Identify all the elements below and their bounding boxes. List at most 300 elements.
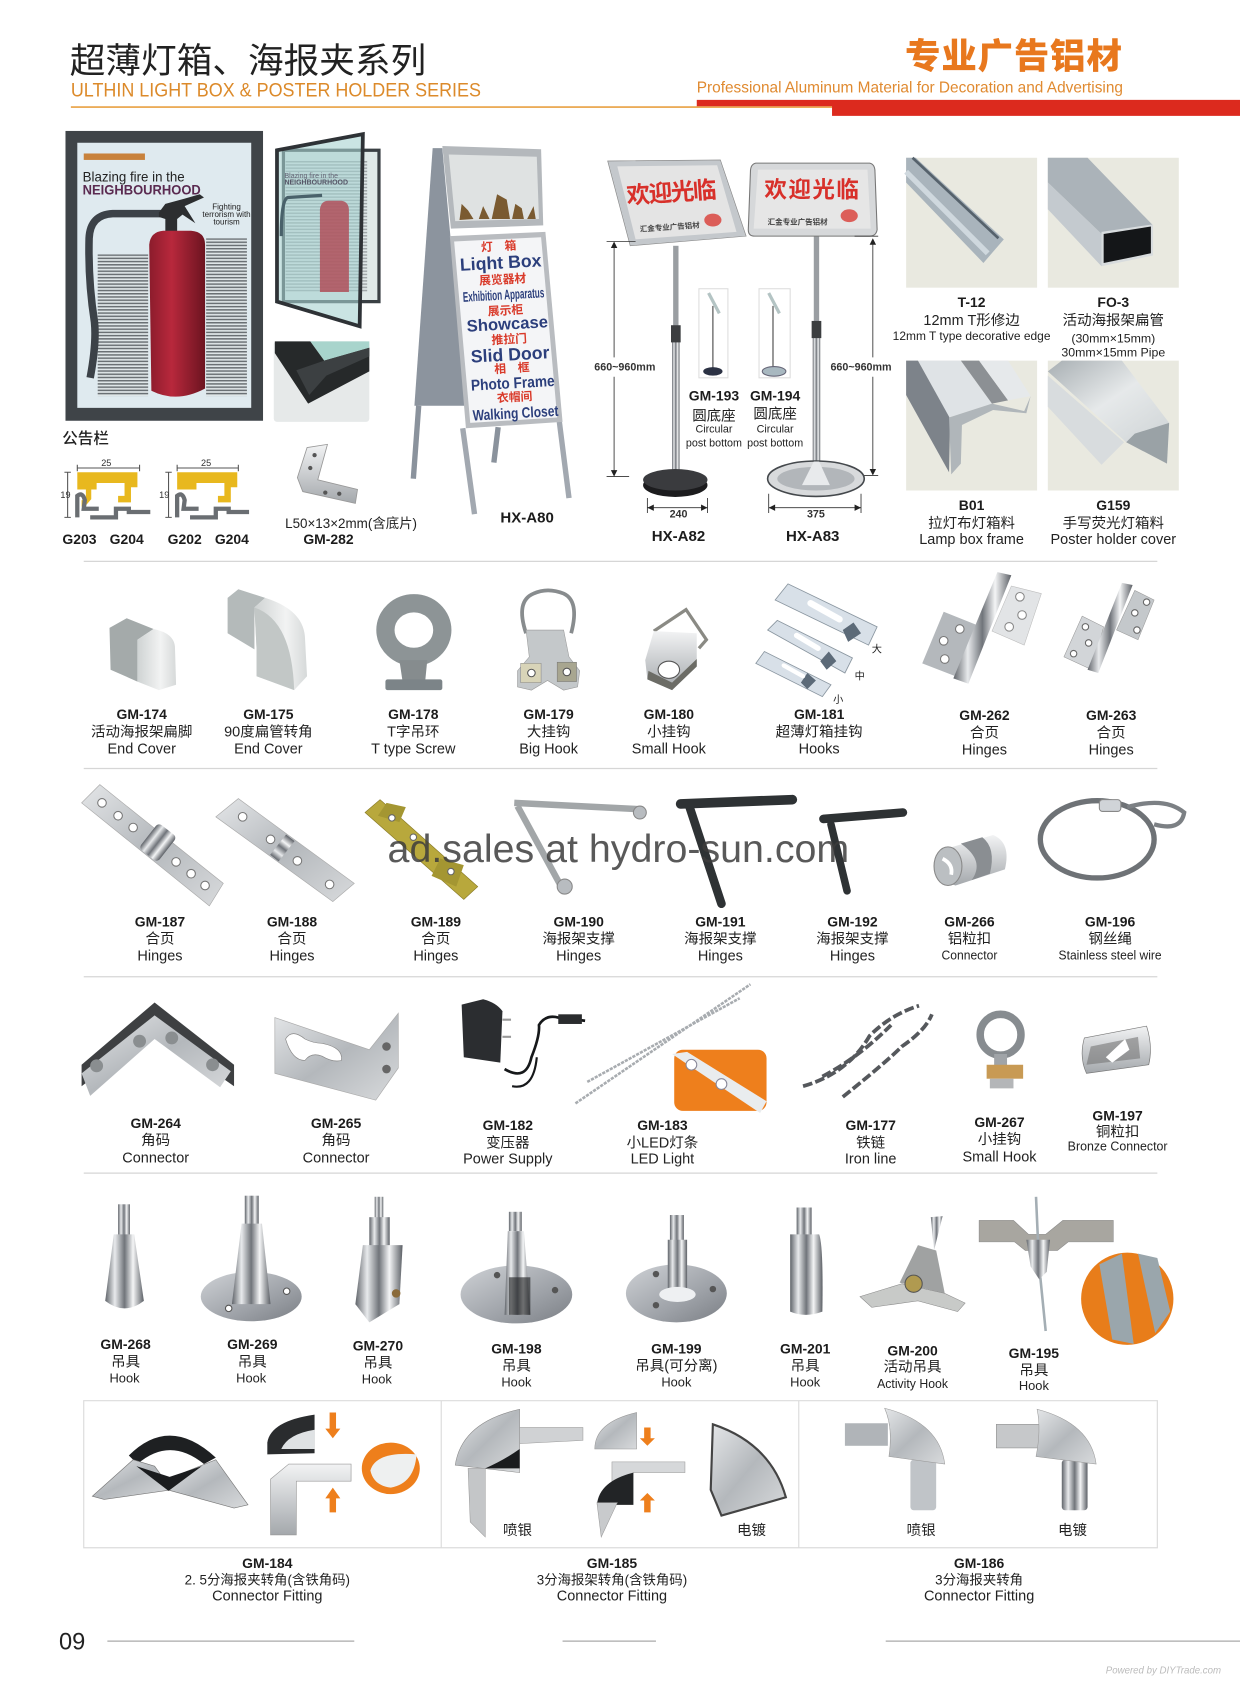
label: GM-197 [1068,1108,1168,1154]
label: GM-175: End Cover [234,741,303,757]
label: GM-194: Circular [757,424,794,436]
label: GM-184: Connector Fitting [212,1588,322,1604]
label: GM-192: 海报架支撑 [816,930,889,947]
label: GM-183: GM-183 [637,1117,688,1133]
label: GM-200: Activity Hook [877,1376,949,1391]
icon: GM-265 corner connector [275,1013,398,1100]
label: GM-190: 海报架支撑 [542,930,615,947]
panel captions: 喷银 [907,1522,936,1539]
product: HX-A83 stand [748,163,877,496]
profile labels: G202 [168,531,202,547]
icon: GM-262 hinge [922,572,1041,684]
label: T-12: 12mm T type decorative edge [893,329,1051,343]
label: GM-188 [267,913,317,965]
label: GM-182 [463,1117,553,1168]
plate left [1064,616,1104,670]
labels: row four [100,1336,1059,1393]
label: GM-177: 铁链 [856,1134,886,1151]
top panel image [449,155,539,221]
orange tag [84,153,145,160]
label: GM-195: GM-195 [1009,1345,1059,1361]
label: GM-264: GM-264 [130,1115,181,1131]
label: GM-196: GM-196 [1085,913,1136,929]
extinguisher head [159,194,204,232]
icon: GM-177 chain [803,1006,932,1097]
icon: GM-190 support [514,803,646,894]
label: GM-191: Hinges [698,949,743,965]
label: GM-190: Hinges [556,949,601,965]
label: GM-262: GM-262 [959,707,1010,723]
cable [1036,1197,1046,1331]
icon: GM-181 hook plates: 中 [855,669,865,682]
board text: 展览器材 [479,271,527,288]
GM-185 assembled corner [455,1409,583,1537]
profile labels: G204 [215,531,249,547]
label: GM-193: GM-193 [689,387,739,403]
panel captions: 电镀 [1058,1522,1088,1539]
icon: GM-182 power supply [462,999,585,1087]
label: GM-282: GM-282 [303,531,354,547]
icon: GM-191 support [681,800,792,904]
profile labels [62,531,249,547]
label: GM-178: T type Screw [371,741,456,757]
dark back [82,1003,234,1086]
profile G202 G204 [159,458,249,517]
label: B01: B01 [959,497,985,513]
board text: Exhibition Apparatus [462,284,545,305]
label: GM-177 [845,1117,896,1168]
extinguisher hose [89,214,161,378]
profile G203 G204 [60,458,150,517]
sign small text: 汇金专业广告铝材 [768,216,828,226]
icon: GM-174 end cover [110,618,176,690]
dimension: base 240 [647,498,707,520]
board text: Showcase [466,312,548,336]
label: GM-181: Hooks [799,741,840,757]
back legs [413,406,498,479]
sign logo [841,209,858,222]
label: GM-265: 角码 [322,1132,351,1149]
profile G203 G204: 19 [60,490,71,500]
sign logo [704,214,721,226]
board text: 推拉门 [491,331,527,347]
icon: GM-269 hook [201,1196,302,1321]
plate [979,1220,1113,1250]
large plate [775,584,877,645]
icon: GM-266 connector [934,835,1007,886]
sign panel [617,165,736,239]
label: GM-267 [962,1114,1037,1165]
icon: GM-197 bronze connector [1082,1026,1150,1073]
thumbnail: GM-193 [699,289,728,378]
label: GM-196: 钢丝绳 [1088,930,1132,947]
label: GM-193 [686,387,742,450]
icon: GM-188 hinge [216,799,354,902]
label: HX-A80: HX-A80 [500,510,554,527]
label: T-12 [893,294,1051,343]
sign frame [748,163,877,236]
label: GM-198 [491,1340,542,1390]
profile labels: G203 [62,531,97,547]
front legs [463,422,569,514]
plate slots [811,603,840,619]
product: HX-A82 stand [608,160,746,497]
frame corner detail photo [274,341,369,422]
label: GM-193: Circular [695,424,733,436]
grey profile [177,494,249,517]
brand subtitle: Professional Aluminum Material for Decoration and Advertising [697,79,1123,96]
label: GM-185: 3分海报架转角(含铁角码) [537,1572,687,1587]
GM-184 top piece highlight [281,1430,315,1449]
label: GM-186: GM-186 [954,1555,1005,1571]
label: GM-264: Connector [122,1150,189,1166]
sign welcome text: 欢迎光临 [626,177,717,210]
dimension marks [64,465,140,517]
label: GM-263: GM-263 [1086,707,1137,723]
labels: row two [135,913,1162,965]
label: B01: Lamp box frame [919,532,1024,548]
dimension: height left [594,242,655,477]
label: GM-265: Connector [303,1150,370,1166]
icon: GM-187 hinge [82,785,223,906]
label: FO-3: FO-3 [1097,294,1129,310]
poster frame product: tourism [213,217,240,226]
door glass [277,134,363,326]
label: GM-185: GM-185 [587,1555,637,1571]
label: GM-177: Iron line [845,1152,896,1168]
orange magnifier [1081,1253,1173,1345]
label: GM-186: Connector Fitting [924,1588,1034,1604]
label: GM-201: 吊具 [791,1359,820,1375]
dimension: height right [830,236,892,475]
size marks: 大 [872,643,882,656]
grey profile [77,494,150,517]
label: GM-191 [684,913,757,965]
GM-185 plated part [711,1424,786,1516]
profile photo: FO-3 [1048,158,1179,288]
poster headline bold: NEIGHBOURHOOD [83,182,201,197]
board text: 衣帽间 [497,389,533,405]
label: GM-201: Hook [790,1375,821,1390]
label: GM-266 [942,913,998,963]
label: FO-3 [1061,294,1165,359]
profile G202 G204: 25 [201,458,211,468]
label: FO-3: 30mm×15mm Pipe [1061,345,1165,359]
label: GM-265: GM-265 [311,1115,361,1131]
pin [953,572,1011,684]
main board frame [450,232,563,428]
label: GM-197: GM-197 [1092,1108,1143,1124]
dimension: height left: 660~960mm [594,361,655,373]
label: GM-194: GM-194 [750,387,801,403]
header rule orange [71,106,832,108]
label: GM-181: GM-181 [794,706,845,722]
label: B01: 拉灯布灯箱料 [928,515,1015,532]
label: GM-270 [353,1337,403,1387]
dimension marks [165,465,238,517]
page number: 09 [59,1630,85,1656]
profile photo: G159 [1048,361,1179,491]
label: GM-174: 活动海报架扁脚 [91,723,192,740]
label: GM-189: GM-189 [411,913,461,929]
label: HX-A83: HX-A83 [786,528,839,545]
profile G202 G204: 19 [159,490,169,500]
led strip detail [672,1052,767,1113]
label: GM-198: GM-198 [491,1340,542,1356]
label: GM-175: 90度扁管转角 [224,723,313,740]
label: GM-199: 吊具(可分离) [635,1358,717,1375]
arrow down [325,1413,340,1438]
label: GM-270: Hook [362,1372,392,1387]
label: GM-197: Bronze Connector [1068,1139,1168,1154]
fitting [1026,1240,1050,1279]
poster paper [77,143,251,408]
plate bends [801,623,861,689]
icon: GM-196 steel wire [1040,800,1184,878]
label: GM-180: Small Hook [632,741,707,757]
label: GM-189: 合页 [421,930,450,947]
label: GM-195: 吊具 [1019,1363,1048,1379]
pole [673,246,679,330]
profile photo: T-12 [906,158,1037,288]
label: GM-200 [877,1343,949,1391]
label: GM-191: 海报架支撑 [684,930,757,947]
label: GM-183 [627,1117,698,1168]
dimension: base 240: 240 [670,508,687,520]
icon: GM-282 corner bracket [297,444,358,503]
label: GM-175: GM-175 [243,706,294,722]
label: GM-192: Hinges [830,949,875,965]
watermark: ad.sales at hydro-sun.com [388,828,849,871]
icon: GM-181 hook plates: 小 [833,694,843,706]
label: GM-178 [371,706,456,757]
orange detail box [674,1050,767,1111]
label: GM-182: Power Supply [463,1152,553,1168]
notice board label: 公告栏 [62,429,109,447]
sign welcome text: 欢迎光临 [764,177,859,202]
base [768,461,864,496]
label: GM-179 [519,706,579,757]
label: GM-196 [1059,913,1162,963]
sign panel [754,170,871,229]
holes [955,625,964,633]
icon: GM-192 support [823,813,903,891]
label: GM-194 [747,387,803,450]
yellow profile [77,472,137,507]
board text line: 灯 箱 [481,238,517,254]
main board paper [454,237,557,423]
pole [814,236,819,327]
label: GM-175 [224,706,313,757]
orange detail [362,1443,420,1494]
label: GM-184: 2. 5分海报夹转角(含铁角码) [185,1572,350,1587]
label: GM-179: GM-179 [523,706,574,722]
label: GM-199: Hook [661,1375,692,1390]
GM-186 right part [996,1409,1096,1510]
GM-184 bracket [271,1464,351,1535]
labels: row three [122,1108,1168,1168]
label: GM-269: GM-269 [227,1336,278,1352]
label: GM-188: 合页 [278,930,307,947]
icon: GM-189 hinge [365,800,478,899]
icon: GM-263 hinge [1064,583,1154,673]
product: HX-A80 A-frame stand [413,146,569,514]
labels: connector fittings [185,1555,1034,1604]
label: G159: Poster holder cover [1051,532,1176,548]
brand heading: 专业广告铝材 [905,37,1122,77]
thumbnail: GM-194 [759,289,790,378]
icon: GM-180 small hook [645,610,706,690]
label: GM-196: Stainless steel wire [1059,948,1162,963]
glass corner [310,341,369,361]
label: GM-270: 吊具 [363,1355,392,1371]
label: GM-197: 铜粒扣 [1096,1124,1139,1141]
label: GM-282 [285,516,417,547]
label: GM-186 [924,1555,1034,1604]
label: T-12: 12mm T形修边 [923,312,1020,329]
label: GM-184 [185,1555,350,1604]
board text: Walking Closet [472,403,559,425]
label: GM-188: GM-188 [267,913,317,929]
board text: 相 框 [494,360,530,376]
icon: GM-200 activity hook [860,1216,965,1312]
icon: GM-183 LED strip [575,984,767,1113]
GM-184 top piece [267,1415,315,1454]
label: GM-268 [100,1336,151,1385]
small plate [756,652,831,697]
plate left [922,612,976,676]
poster frame product [65,131,263,421]
label: GM-187: Hinges [137,949,183,965]
label: GM-193: post bottom [686,438,742,450]
label: GM-268: GM-268 [100,1336,151,1352]
label: GM-200: GM-200 [887,1343,938,1359]
sign small text: 汇金专业广告铝材 [639,220,700,234]
label: GM-264 [122,1115,189,1166]
dimension: base 375 [769,494,861,520]
label: GM-262: Hinges [962,743,1007,759]
label: GM-177: GM-177 [846,1117,896,1133]
english subtitle: ULTHIN LIGHT BOX & POSTER HOLDER SERIES [71,81,481,102]
icon: GM-268 hook [105,1204,144,1308]
GM-184 assembled corner [92,1436,248,1508]
medium plate [768,620,852,673]
label: GM-187: GM-187 [135,913,185,929]
GM-185 pieces [595,1413,685,1537]
label: GM-190 [542,913,615,965]
poster inside [286,161,367,292]
icon: GM-270 hook [355,1197,403,1322]
icon: GM-195 hook with cable [979,1197,1173,1345]
silver plate [82,1015,231,1096]
pin [1088,583,1133,673]
label: GM-266: 铝粒扣 [948,930,991,947]
label: FO-3: 活动海报架扁管 [1063,312,1164,329]
small poster heading: Blazing fire in the [285,173,338,180]
label: GM-282: L50×13×2mm(含底片) [285,516,417,531]
extinguisher body [149,231,205,397]
top panel frame [442,146,543,229]
bevel [296,348,369,395]
label: GM-194: 圆底座 [753,406,797,423]
connector fitting panel [84,1401,1157,1548]
label: GM-183: 小LED灯条 [627,1134,698,1151]
label: GM-174 [91,706,192,757]
label: GM-189: Hinges [413,949,458,965]
label: GM-194: post bottom [747,438,803,450]
label: G159 [1051,497,1176,548]
back frame [414,148,466,406]
label: GM-267: Small Hook [962,1149,1037,1165]
label: GM-262 [959,707,1010,759]
back frame [283,150,379,302]
label: GM-183: LED Light [631,1152,694,1168]
extinguisher reflection [320,201,349,292]
row dividers [84,561,1157,1173]
plate right [992,586,1041,645]
profile labels: G204 [110,531,144,547]
label: GM-263: 合页 [1097,724,1126,741]
label: T-12: T-12 [958,294,986,310]
footer [59,1630,1240,1676]
poster side text: Fighting [212,202,241,211]
label: GM-190: GM-190 [553,913,604,929]
icon: GM-198 hook [461,1212,572,1323]
dark corner profile [275,341,369,404]
label: GM-188: Hinges [269,949,315,965]
label: GM-180: 小挂钩 [647,723,691,740]
label: G159: G159 [1096,497,1131,513]
cable strands [1099,1254,1170,1344]
board text: Photo Frame [471,373,555,395]
label: GM-185 [537,1555,687,1604]
label: HX-A82: HX-A82 [652,528,705,545]
label: GM-201: GM-201 [780,1340,831,1356]
poster frame product: terrorism with [202,210,251,219]
profile photo: B01 [906,361,1037,491]
GM-186 left part [845,1408,945,1510]
title: 超薄灯箱、海报夹系列 [70,41,426,81]
panel captions: 喷银 [503,1522,532,1539]
label: GM-262: 合页 [970,724,999,741]
label: GM-187 [135,913,185,965]
bolts [90,1059,103,1072]
profile G203 G204: 25 [101,458,111,468]
label: G159: 手写荧光灯箱料 [1063,515,1164,532]
label: FO-3: (30mm×15mm) [1071,331,1155,345]
label: GM-184: GM-184 [242,1555,293,1571]
label: GM-268: Hook [110,1370,140,1385]
label: GM-187: 合页 [145,930,174,947]
label: GM-269: Hook [236,1370,267,1385]
board text [459,237,559,425]
label: GM-192: GM-192 [827,913,878,929]
animals [459,194,536,220]
label: GM-269: 吊具 [238,1354,267,1370]
footer rules [107,1640,1240,1642]
label: GM-193: 圆底座 [692,408,736,425]
label: GM-192 [816,913,889,965]
label: GM-266: Connector [942,948,998,963]
label: GM-181: 超薄灯箱挂钩 [776,723,863,740]
label: GM-195 [1009,1345,1059,1393]
label: GM-199 [635,1340,717,1390]
label: GM-178: T字吊环 [387,723,439,740]
poster frame [65,131,263,421]
label: GM-180: GM-180 [644,706,694,722]
label: GM-179: 大挂钩 [527,723,570,740]
label: GM-178: GM-178 [388,706,439,722]
